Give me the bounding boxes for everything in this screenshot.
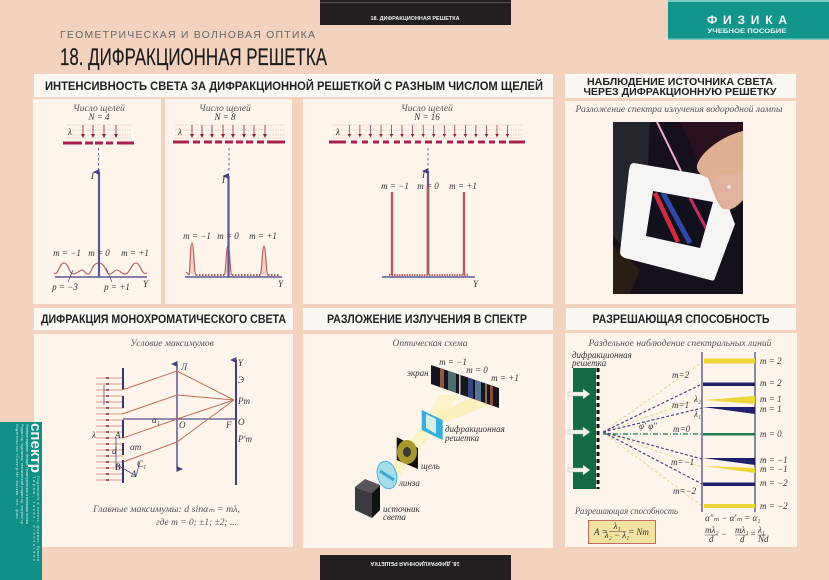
order labels: m = 1 [760, 394, 782, 404]
caption: Условие максимумов [130, 339, 214, 349]
intensity plot: I [221, 175, 226, 185]
diffraction rays: m=0 [673, 424, 691, 434]
panel: N = 8 [165, 99, 292, 304]
top black tab [320, 0, 511, 25]
resolving power formula: λ₂ − λ₁ [604, 530, 629, 540]
bottom black tab: 18. ДИФРАКЦИОННАЯ РЕШЕТКА [370, 560, 460, 566]
incident wave: λ [177, 127, 182, 137]
heading: observation: ЧЕРЕЗ ДИФРАКЦИОННУЮ РЕШЕТКУ [584, 86, 777, 98]
formula: main maxima: Главные максимумы: d sinαₘ = mλ, [92, 505, 240, 515]
order labels: m = −2 [760, 478, 788, 488]
section subtitle: ГЕОМЕТРИЧЕСКАЯ И ВОЛНОВАЯ ОПТИКА [60, 29, 315, 41]
bottom black tab [320, 555, 511, 580]
light source: света [383, 512, 406, 522]
diffraction rays: m=−1 [671, 457, 694, 467]
publisher strip: спектр [27, 423, 44, 473]
panel: monochromatic diffraction [34, 334, 293, 547]
intensity plot: p = −3 [51, 282, 78, 292]
order labels: m = −1 [760, 464, 788, 474]
caption N=4: N = 4 [87, 112, 110, 122]
resolving power formula [574, 506, 679, 544]
publisher strip: Учебное издание. Физика. Геометрическая и волновая оптика [25, 424, 29, 525]
panel: hydrogen lamp photo [565, 101, 796, 304]
intensity plot: m = 0 [417, 181, 439, 191]
caption N=8: N = 8 [213, 112, 236, 122]
heading: intensity [34, 74, 553, 97]
formula: main maxima: где m = 0; ±1; ±2; ... [156, 517, 237, 528]
heading: intensity: ИНТЕНСИВНОСТЬ СВЕТА ЗА ДИФРАКЦИОННОЙ РЕШЕТКОЙ С РАЗНЫМ ЧИСЛОМ ЩЕЛЕЙ [45, 80, 543, 93]
heading: resolving power [566, 308, 796, 330]
heading: observation [565, 74, 796, 98]
intensity plot: I [90, 171, 95, 181]
ray diagram: P′m [237, 434, 252, 444]
ray diagram: F [225, 420, 232, 430]
diffraction rays: m=2 [672, 370, 690, 380]
angle formula: mλ₁ [735, 525, 749, 535]
diffraction rays: φ′ φ″ [639, 421, 657, 431]
slit [397, 437, 440, 471]
intensity plot: m = +1 [249, 231, 277, 241]
grating [329, 140, 525, 144]
ray diagram: O [179, 420, 186, 430]
ray diagram: Л [180, 362, 188, 372]
caption N=8: Число щелей [199, 103, 251, 114]
heading: resolving power: РАЗРЕШАЮЩАЯ СПОСОБНОСТЬ [592, 314, 770, 326]
ray diagram: αm [130, 442, 142, 452]
diffraction rays: m=−2 [673, 486, 697, 496]
caption N=16: Число щелей [401, 103, 453, 114]
angle formula: d [740, 534, 745, 544]
incident wave [175, 125, 285, 138]
publisher strip: Редактор, художник, технический редактор, корректор [20, 424, 24, 524]
ray diagram: d [112, 446, 117, 456]
diffraction rays: m=1 [672, 400, 689, 410]
title: 18. ДИФРАКЦИОННАЯ РЕШЕТКА [60, 44, 327, 71]
heading: monochromatic [34, 308, 293, 330]
angle formula: − [721, 529, 727, 539]
ray diagram: Δ [130, 469, 136, 479]
angle formula: mλ₂ [705, 525, 719, 535]
intensity plot: Y [473, 279, 479, 289]
diffraction grating [422, 410, 505, 443]
diffraction grating: решетка [444, 433, 480, 443]
intensity plot [51, 148, 149, 292]
incident wave: λ [67, 127, 72, 137]
resolving power formula: Разрешающая способность [574, 506, 679, 517]
angle formula [705, 513, 769, 544]
heading: observation: НАБЛЮДЕНИЕ ИСТОЧНИКА СВЕТА [587, 76, 773, 88]
caption: Разложение спектра излучения водородной лампы [574, 104, 783, 115]
intensity plot: m = 0 [217, 231, 239, 241]
incident wave [333, 125, 523, 138]
incident wave: λ [335, 127, 340, 137]
incident wave [67, 125, 132, 138]
intensity plot: m = 0 [88, 248, 110, 258]
brand badge: physics: УЧЕБНОЕ ПОСОБИЕ [708, 28, 787, 35]
intensity plot: m = −1 [183, 231, 211, 241]
publisher strip: Подписано в печать, формат, бумага [36, 476, 40, 562]
order labels [760, 356, 788, 511]
publisher strip: Издательство «Спектр-М», Москва, тел., факс [15, 424, 19, 519]
lens [374, 459, 420, 491]
panel: resolving power [565, 333, 797, 547]
intensity plot: m = +1 [121, 248, 149, 258]
resolving power formula: A = [593, 527, 608, 537]
angle formula: λ₁ [757, 525, 765, 535]
order labels: m = 2 [760, 356, 782, 366]
angle formula: d [709, 534, 714, 544]
intensity plot [183, 148, 284, 289]
grating [63, 142, 134, 144]
light beams [380, 395, 490, 486]
order labels: m = 1 [760, 404, 782, 414]
intensity plot: m = +1 [449, 181, 477, 191]
ray diagram: B [115, 462, 121, 472]
order labels: m = −1 [760, 455, 788, 465]
publisher strip: Тираж, заказ, отпечатано [32, 476, 36, 561]
light source: источник [383, 504, 421, 514]
screen with spectral lines [702, 352, 755, 512]
ray diagram: λ [91, 430, 96, 440]
order labels: m = −2 [760, 501, 788, 511]
brand badge: physics [668, 0, 829, 40]
ray diagram: Э [238, 375, 244, 385]
ray diagram [91, 358, 252, 485]
ray diagram: Pm [237, 396, 250, 406]
caption N=4 [73, 103, 125, 122]
order labels: m = 0 [760, 429, 782, 439]
top black tab: 18. ДИФРАКЦИОННАЯ РЕШЕТКА [370, 16, 460, 22]
grating block: решетка [571, 358, 607, 368]
panel: N = 4 [33, 99, 161, 304]
intensity plot [381, 148, 479, 289]
diffraction grating: дифракционная [445, 424, 505, 434]
spectrum screen [407, 357, 519, 410]
ray diagram: C₁ [137, 459, 146, 469]
caption N=16: N = 16 [413, 112, 440, 122]
intensity plot: m = −1 [381, 181, 409, 191]
spectrum screen: экран [407, 368, 429, 378]
panel: N = 16 [303, 99, 553, 304]
intensity plot: I [421, 170, 426, 180]
diffraction rays: λ₁ [693, 409, 701, 419]
diffraction rays [603, 362, 702, 506]
spectrum screen: m = +1 [491, 373, 519, 383]
diffraction rays: λ₂ [693, 394, 701, 404]
caption N=8 [199, 103, 251, 122]
intensity plot: Y [278, 279, 284, 289]
caption N=4: Число щелей [73, 103, 125, 114]
spectrum screen: m = −1 [439, 357, 467, 367]
grating block [568, 350, 632, 489]
ray diagram: Y [238, 358, 244, 368]
ray diagram: A [114, 430, 121, 440]
heading: spectrum: РАЗЛОЖЕНИЕ ИЗЛУЧЕНИЯ В СПЕКТР [327, 314, 527, 326]
caption: Оптическая схема [393, 339, 468, 349]
angle formula: = [750, 529, 756, 539]
intensity plot: m = −1 [53, 248, 81, 258]
grating block: дифракционная [572, 350, 632, 360]
spectrum screen: m = 0 [466, 365, 488, 375]
ray diagram: α₁ [152, 415, 160, 425]
intensity plot: Y [143, 279, 149, 289]
publisher strip [0, 422, 44, 580]
light source [355, 479, 421, 522]
order labels: m = 2 [760, 378, 782, 388]
lens: линза [398, 478, 420, 488]
grating [173, 140, 285, 144]
panel: spectrum [303, 334, 553, 548]
caption: Раздельное наблюдение спектральных линий [587, 338, 772, 349]
heading: monochromatic: ДИФРАКЦИЯ МОНОХРОМАТИЧЕСКОГО СВЕТА [41, 314, 286, 326]
angle formula: α″ₘ − α′ₘ = α₁ [705, 513, 760, 523]
ray diagram: O [238, 417, 245, 427]
formula: main maxima [92, 505, 240, 528]
resolving power formula: λ₁ [612, 521, 621, 531]
heading: spectrum [303, 308, 553, 330]
slit: щель [421, 461, 440, 471]
angle formula: Nd [757, 534, 769, 544]
intensity plot: p = +1 [103, 282, 130, 292]
caption N=16 [401, 103, 453, 122]
resolving power formula: = Nm [628, 527, 649, 537]
brand badge: physics: ФИЗИКА [707, 13, 787, 27]
photo: slide with grating [613, 122, 743, 294]
